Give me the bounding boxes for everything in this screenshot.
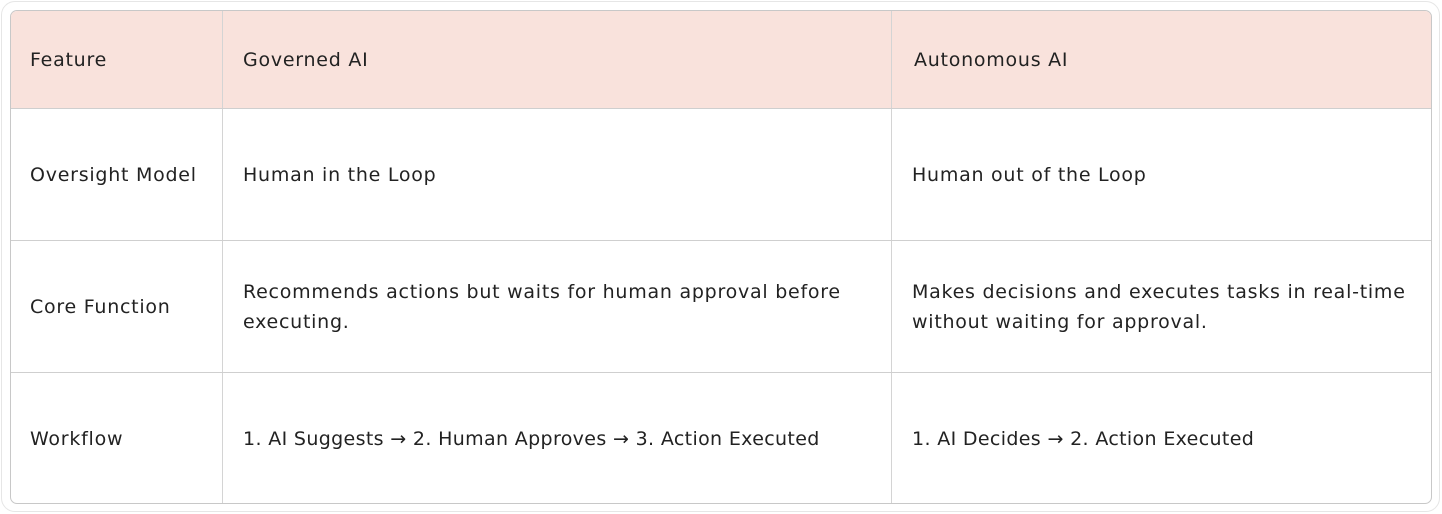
header row: Autonomous AI <box>914 49 1068 71</box>
header row: Governed AI <box>243 49 368 71</box>
row: core function: Core Function <box>30 296 171 318</box>
row: workflow: Workflow <box>30 428 123 450</box>
row: oversight model: Oversight Model <box>30 164 197 186</box>
row: oversight model <box>11 109 1431 241</box>
header row <box>11 11 1431 109</box>
row: workflow: 1. AI Suggests → 2. Human Approves → 3. Action Executed <box>243 428 820 450</box>
row: core function: Recommends actions but waits for human approval before <box>243 281 841 303</box>
row: core function: executing. <box>243 311 350 333</box>
row: oversight model: Human out of the Loop <box>912 164 1147 186</box>
row: core function: without waiting for approval. <box>912 311 1208 333</box>
row: core function: Makes decisions and executes tasks in real-time <box>912 281 1406 303</box>
row: core function <box>11 241 1431 373</box>
row: workflow <box>30 373 1254 503</box>
row: workflow: 1. AI Decides → 2. Action Executed <box>912 428 1254 450</box>
row: oversight model: Human in the Loop <box>243 164 436 186</box>
header row: Feature <box>30 49 107 71</box>
